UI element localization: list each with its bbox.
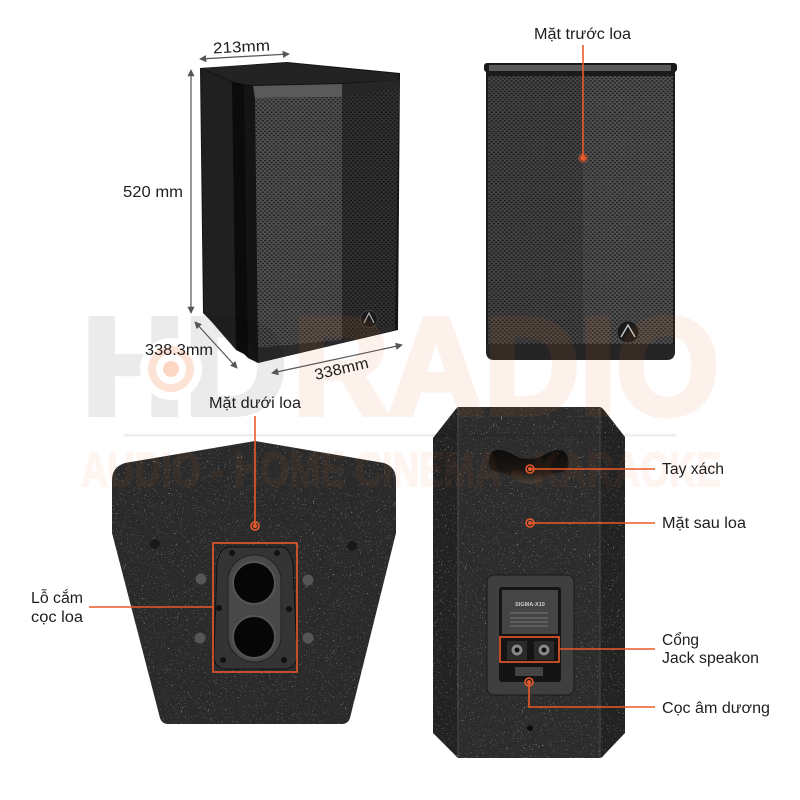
speaker: front view [484, 63, 677, 360]
input plate: SIGMA-X10 [515, 602, 545, 608]
callout: terminal cup: cọc loa [31, 609, 83, 626]
callout: binding posts [525, 678, 770, 717]
callout: speakon ports [500, 632, 759, 667]
dimension: depth: 338.3mm [145, 342, 213, 359]
dimension: width: 213mm [213, 37, 270, 57]
dimension arrows [191, 54, 402, 373]
speaker: bottom view [110, 440, 400, 726]
callout: bottom face [209, 395, 301, 530]
watermark: HD Radio logo [81, 290, 721, 497]
dimension: height: 520 mm [123, 184, 183, 201]
watermark: HD Radio logo: RADIO [293, 290, 719, 444]
callout: speakon ports: Cổng [662, 632, 699, 649]
callout: front face: Mặt trước loa [534, 26, 631, 43]
speaker: perspective view [200, 62, 400, 363]
callout: bottom face: Mặt dưới loa [209, 395, 301, 412]
callout: front face [534, 26, 631, 163]
speaker: rear view [433, 407, 625, 758]
dimension: front width: 338mm [313, 355, 370, 384]
callout: speakon ports: Jack speakon [662, 650, 759, 667]
input plate [487, 575, 574, 695]
callout: rear face: Mặt sau loa [662, 515, 746, 532]
callout: terminal cup: Lỗ cắm [31, 590, 83, 607]
callout: carry handle [526, 461, 724, 478]
callout: terminal cup [31, 543, 297, 672]
watermark: HD Radio logo: HD [82, 290, 287, 444]
callout: carry handle: Tay xách [662, 461, 724, 478]
carry handle [489, 450, 569, 484]
terminal cup plate [214, 547, 297, 669]
callout: binding posts: Cọc âm dương [662, 700, 770, 717]
callout: rear face [526, 515, 746, 532]
